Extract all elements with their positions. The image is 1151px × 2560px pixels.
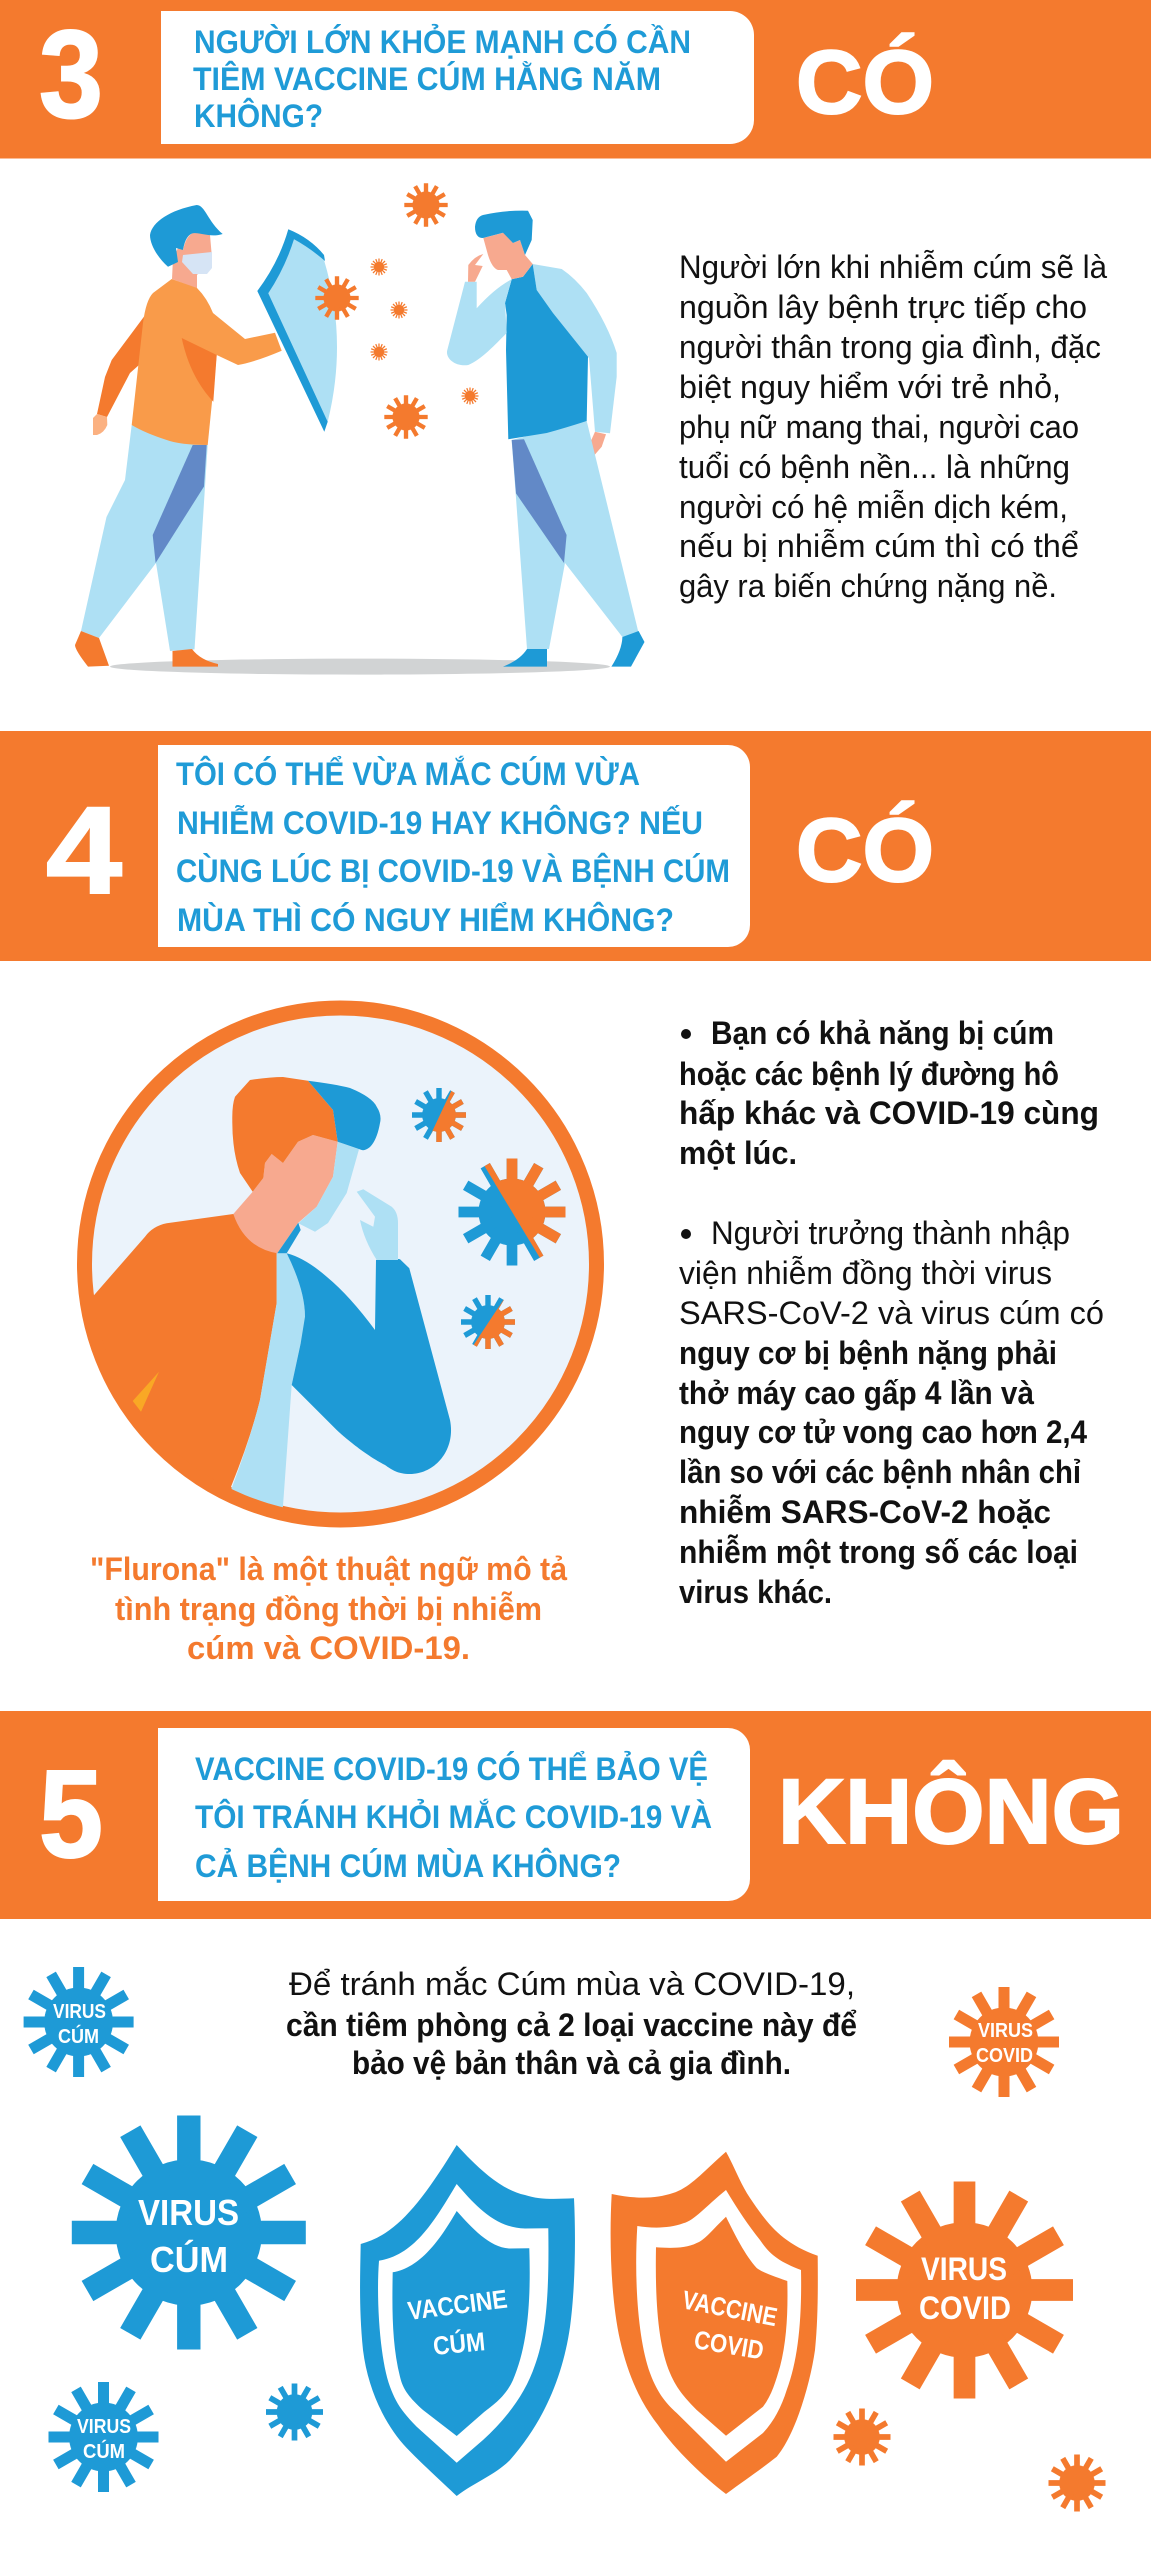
bullet 2: virus khác. [679, 1574, 832, 1610]
illustration: two men and shield [75, 183, 644, 675]
question box 5: VACCINE COVID-19 CÓ THỂ BẢO VỆ [195, 1751, 708, 1787]
small virus: top left, cúm [24, 1967, 134, 2077]
left man [75, 205, 282, 667]
question box 5: CẢ BỆNH CÚM MÙA KHÔNG? [195, 1848, 621, 1884]
body text section 5 [286, 1966, 857, 2081]
small virus: bottom left, cúm: VIRUS [77, 2416, 131, 2438]
ground shadow [110, 659, 610, 675]
bullet 2: lần so với các bệnh nhân chỉ [679, 1454, 1081, 1490]
small virus: top right, covid [949, 1987, 1059, 2097]
answer KHÔNG: KHÔNG [778, 1760, 1124, 1863]
bullet 2: nhiễm SARS-CoV-2 hoặc [679, 1494, 1051, 1530]
bullet 2: nhiễm một trong số các loại [679, 1534, 1078, 1570]
question box 5 [158, 1728, 750, 1901]
bullet 2: viện nhiễm đồng thời virus [679, 1255, 1052, 1291]
body text section 3: gây ra biến chứng nặng nề. [679, 568, 1057, 604]
section 3 banner [0, 0, 1151, 158]
caption: Flurona: tình trạng đồng thời bị nhiễm [115, 1591, 542, 1627]
body text section 3: phụ nữ mang thai, người cao [679, 409, 1079, 445]
bullet 1: hấp khác và COVID-19 cùng [679, 1095, 1099, 1131]
body text section 3: tuổi có bệnh nền... là những [679, 449, 1070, 485]
bullet 1 [679, 1015, 1099, 1171]
body text section 3: người có hệ miễn dịch kém, [679, 489, 1068, 525]
body text section 4 [679, 1015, 1104, 1610]
body text section 3: nguồn lây bệnh trực tiếp cho [679, 289, 1087, 325]
body text section 3: biệt nguy hiểm với trẻ nhỏ, [679, 369, 1061, 405]
question box 3 [161, 11, 754, 144]
small virus: top left, cúm: CÚM [58, 2024, 99, 2048]
body text section 5: Để tránh mắc Cúm mùa và COVID-19, [289, 1966, 855, 2002]
body text section 3: người thân trong gia đình, đặc [679, 329, 1101, 365]
answer CÓ: CÓ [796, 800, 934, 901]
answer CÓ: CÓ [796, 32, 934, 133]
large virus: covid [856, 2182, 1073, 2398]
bullet 2: nguy cơ bị bệnh nặng phải [679, 1335, 1057, 1371]
question box 4 [158, 745, 750, 947]
body text section 3: nếu bị nhiễm cúm thì có thể [679, 528, 1079, 564]
shield: vaccine covid [611, 2152, 818, 2494]
body text section 3: Người lớn khi nhiễm cúm sẽ là [679, 249, 1107, 285]
large virus: cúm [72, 2116, 306, 2350]
shield: vaccine covid: COVID [692, 2324, 766, 2365]
small virus: bottom left, cúm [48, 2382, 158, 2492]
small virus: top left, cúm: VIRUS [53, 2001, 106, 2023]
bullet 1: Bạn có khả năng bị cúm [711, 1015, 1054, 1051]
large virus: covid: VIRUS [921, 2251, 1007, 2287]
body text section 5: cần tiêm phòng cả 2 loại vaccine này để [286, 2007, 857, 2043]
question box 3: KHÔNG? [194, 98, 323, 134]
section 4 banner [0, 731, 1151, 961]
question box 4: TÔI CÓ THỂ VỪA MẮC CÚM VỪA [176, 756, 640, 792]
section 5 banner [0, 1711, 1151, 1919]
caption: Flurona [90, 1551, 567, 1666]
virus particles [315, 183, 478, 439]
number 3: 3 [39, 6, 103, 144]
question box 4: NHIỄM COVID-19 HAY KHÔNG? NẾU [177, 805, 703, 841]
large virus: cúm: VIRUS [138, 2192, 239, 2233]
shield: vaccine covid: VACCINE [680, 2284, 780, 2332]
small virus: top right, covid: COVID [976, 2045, 1033, 2067]
body text section 5: bảo vệ bản thân và cả gia đình. [352, 2045, 791, 2081]
bullet 1: một lúc. [679, 1135, 797, 1171]
caption: Flurona: cúm và COVID-19. [187, 1630, 470, 1666]
question box 4: CÙNG LÚC BỊ COVID-19 VÀ BỆNH CÚM [176, 853, 730, 889]
small virus: bottom left, cúm: CÚM [83, 2439, 125, 2463]
bullet 1: hoặc các bệnh lý đường hô [679, 1056, 1059, 1092]
caption: Flurona: "Flurona" là một thuật ngữ mô tả [90, 1551, 567, 1587]
number 5: 5 [39, 1746, 103, 1884]
circular illustration: sick person with viruses [80, 1008, 596, 1520]
person [80, 1077, 451, 1515]
right man [447, 211, 644, 667]
shield [257, 229, 337, 432]
small virus: top right, covid: VIRUS [978, 2020, 1033, 2042]
number 4: 4 [46, 782, 122, 920]
body text section 3 [679, 249, 1107, 604]
question box 3: TIÊM VACCINE CÚM HẰNG NĂM [193, 61, 661, 97]
large virus: cúm: CÚM [150, 2238, 228, 2280]
bullet 2: SARS-CoV-2 và virus cúm có [679, 1295, 1104, 1331]
half-and-half viruses [412, 1088, 566, 1349]
question box 3: NGƯỜI LỚN KHỎE MẠNH CÓ CẦN [194, 24, 691, 60]
decorative virus particles [266, 2384, 1106, 2512]
bullet 2 [679, 1215, 1104, 1610]
bullet 2: nguy cơ tử vong cao hơn 2,4 [679, 1414, 1087, 1450]
shield: vaccine cúm: CÚM [432, 2326, 486, 2361]
question box 5: TÔI TRÁNH KHỎI MẮC COVID-19 VÀ [195, 1799, 712, 1835]
bullet 2: Người trưởng thành nhập [711, 1215, 1070, 1251]
large virus: covid: COVID [919, 2290, 1011, 2326]
shield: vaccine cúm: VACCINE [406, 2283, 509, 2326]
bullet 2: thở máy cao gấp 4 lần và [679, 1375, 1034, 1411]
shield: vaccine cúm [360, 2145, 575, 2496]
question box 4: MÙA THÌ CÓ NGUY HIỂM KHÔNG? [177, 902, 674, 938]
